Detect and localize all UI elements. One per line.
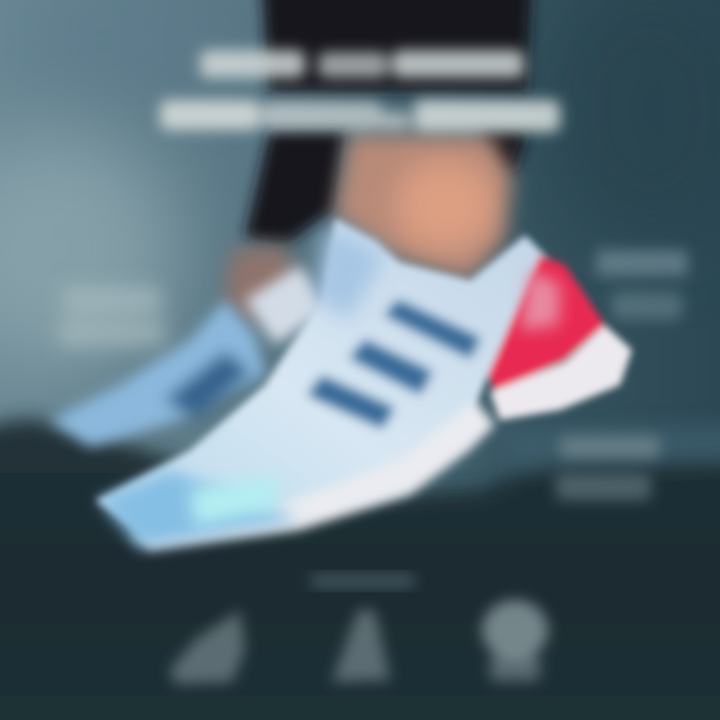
right label: lower <box>556 436 660 500</box>
title <box>160 50 560 132</box>
leg: black leggings <box>245 0 532 245</box>
dark floor <box>0 418 720 720</box>
icon: left <box>170 610 245 684</box>
right label: upper <box>596 250 688 320</box>
shoe toe <box>100 470 300 548</box>
shoe sole <box>130 400 495 550</box>
icon: right <box>482 600 548 681</box>
front shoe <box>95 218 632 550</box>
bottom heading <box>310 574 415 588</box>
left label <box>58 288 166 346</box>
icon: centre <box>332 610 390 682</box>
rear shoe <box>50 265 330 447</box>
leg: skin <box>225 135 512 325</box>
shoe upper <box>95 218 550 545</box>
shoe heel: red panel <box>488 255 605 392</box>
shoe stripes <box>308 300 480 428</box>
shoe heel: white sole <box>490 325 632 420</box>
